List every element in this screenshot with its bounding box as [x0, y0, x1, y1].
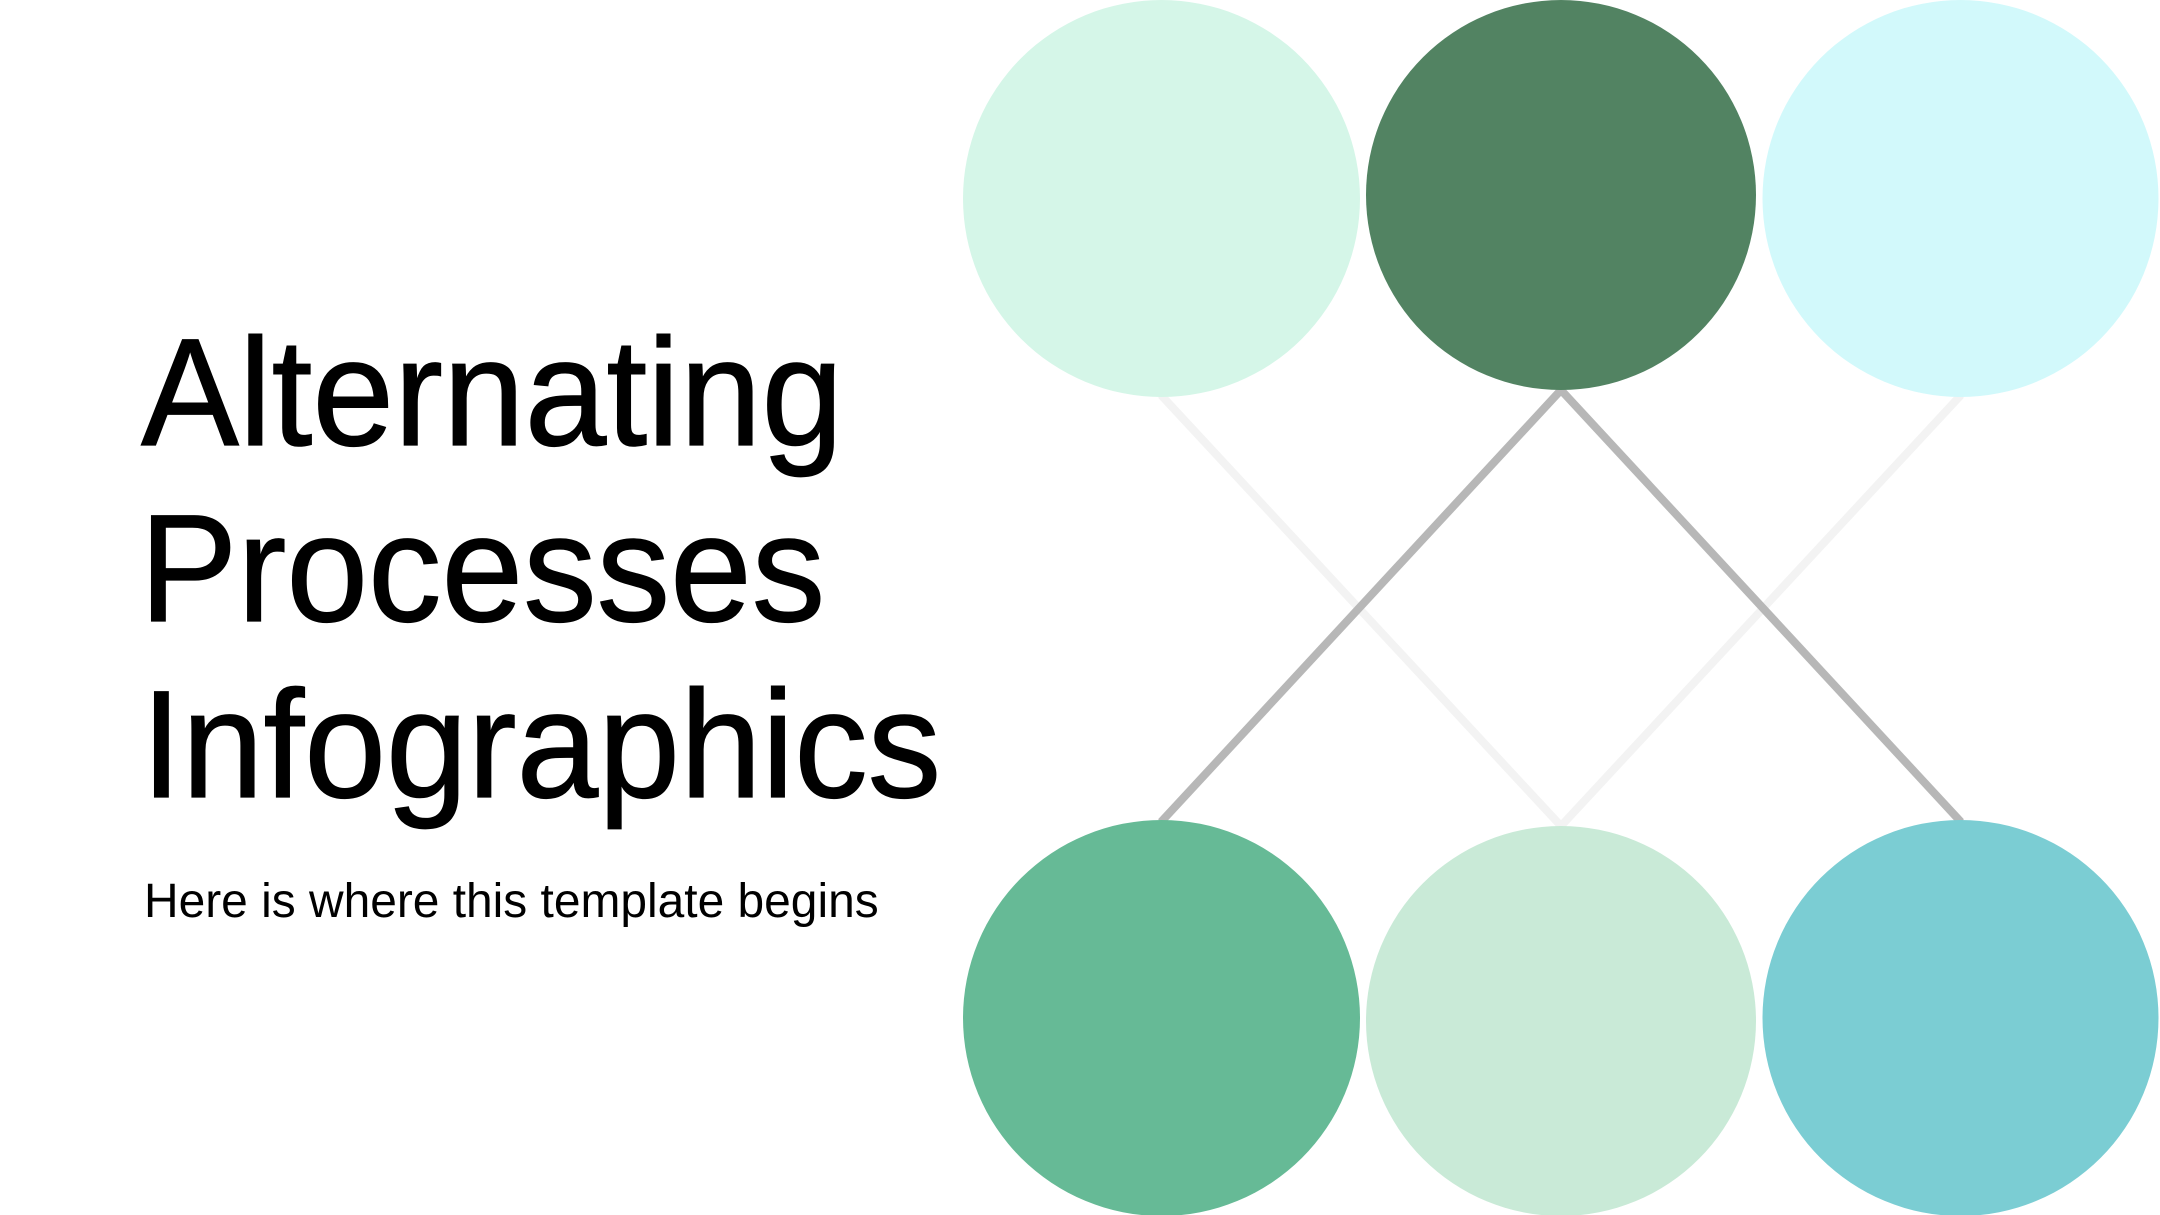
title: Processes: [140, 482, 825, 654]
title: [140, 306, 941, 830]
circle: top middle dark green: [1366, 0, 1756, 390]
title: Alternating: [141, 306, 843, 478]
circle: top left pale mint: [963, 0, 1360, 397]
circle: top right pale cyan: [1762, 0, 2158, 397]
connectors: light lines: [1161, 395, 1961, 826]
circle: bottom middle pale green: [1366, 826, 1756, 1215]
subtitle: Here is where this template begins: [144, 875, 879, 928]
circle: bottom right teal: [1762, 820, 2158, 1215]
circle: bottom left green: [963, 820, 1360, 1215]
title: Infographics: [141, 658, 941, 830]
connectors: grey lines: [1161, 390, 1961, 822]
